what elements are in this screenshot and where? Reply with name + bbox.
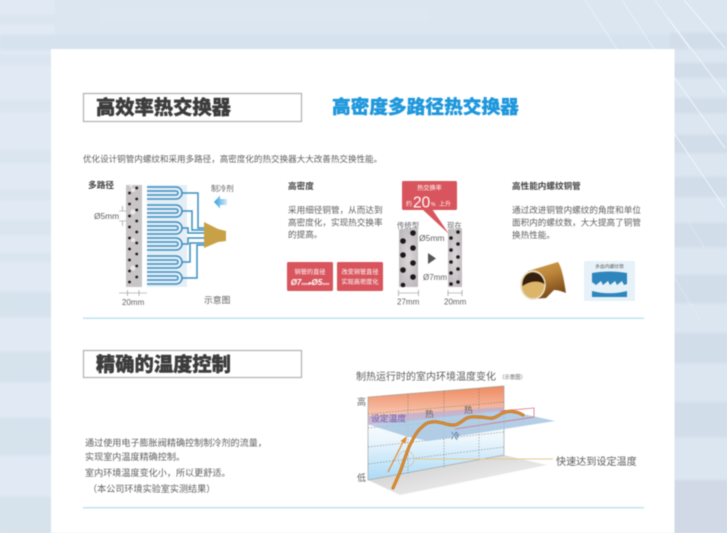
description: 换热性能。 bbox=[512, 229, 555, 240]
description: temperature control: 通过使用电子膨胀阀精确控制制冷剂的流量， bbox=[85, 437, 267, 448]
description: temperature control: （本公司环境实验室实测结果） bbox=[88, 483, 215, 494]
badge: high density change: 实现高密度化 bbox=[341, 278, 379, 286]
chart title: （示意图） bbox=[499, 373, 526, 381]
chart floor bbox=[368, 455, 547, 495]
label: 20mm: 20mm bbox=[122, 298, 145, 307]
current strip: 20mm bbox=[444, 298, 467, 306]
description bbox=[512, 204, 641, 240]
set temperature ribbon bbox=[368, 407, 504, 425]
set temperature band bbox=[455, 408, 534, 429]
label: 热: 热 bbox=[425, 408, 434, 419]
description: temperature control: 室内环境温度变化小，所以更舒适。 bbox=[85, 467, 231, 478]
fin strip with tube holes bbox=[126, 184, 142, 287]
traditional strip: 27mm bbox=[397, 298, 420, 306]
callout: 快速达到设定温度 bbox=[398, 451, 637, 468]
label: 制冷剂: 制冷剂 bbox=[211, 183, 234, 193]
label: 设定温度: 设定温度 bbox=[371, 412, 406, 424]
callout: 20% increase: 上升 bbox=[439, 200, 451, 208]
description: 通过改进铜管内螺纹的角度和单位 bbox=[512, 204, 641, 215]
refrigerant tubes bbox=[147, 185, 205, 287]
divider bbox=[83, 507, 644, 508]
heading: 精确的温度控制 bbox=[84, 350, 302, 378]
intro text: 优化设计铜管内螺纹和采用多路径，高密度化的热交换器大大改善热交换性能。 bbox=[83, 153, 382, 164]
label: Ø7mm: Ø7mm bbox=[423, 273, 447, 282]
callout: 20% increase: 热交换率 bbox=[417, 184, 442, 192]
label: Ø5mm bbox=[94, 206, 126, 226]
axis label: 高: 高 bbox=[357, 396, 366, 407]
label: 20mm bbox=[119, 290, 147, 307]
set temperature plane bbox=[370, 410, 555, 441]
panel: multi-path diagram bbox=[88, 179, 234, 307]
chart wall bbox=[368, 386, 504, 480]
chart: indoor temperature change during heating bbox=[356, 370, 637, 495]
label: 热: 热 bbox=[464, 404, 473, 415]
subheading: 高密度: 高密度 bbox=[288, 180, 314, 191]
subheading: 高性能内螺纹铜管 bbox=[512, 180, 581, 191]
label: Ø5mm: Ø5mm bbox=[419, 233, 444, 243]
callout: 20% increase bbox=[402, 181, 457, 234]
traditional strip bbox=[397, 221, 420, 306]
badge: high density change bbox=[337, 262, 383, 291]
description: 采用细径铜管，从而达到 bbox=[288, 204, 383, 215]
label: 多路径: 多路径 bbox=[88, 179, 114, 190]
divider bbox=[83, 318, 644, 319]
panel: inner-grooved copper tube bbox=[512, 180, 641, 301]
white content panel bbox=[51, 49, 674, 533]
arrow: traditional to current bbox=[428, 253, 436, 264]
arrow: rapid rise bbox=[388, 436, 407, 472]
icon: groove cross-section: 多齿内螺纹管 bbox=[595, 263, 624, 270]
callout: 20% increase: 20 bbox=[413, 194, 431, 212]
distributor valve bbox=[204, 222, 226, 248]
label: 冷: 冷 bbox=[451, 430, 460, 441]
chart title bbox=[356, 370, 526, 383]
heading: 高密度多路径热交换器: 高密度多路径热交换器 bbox=[332, 96, 519, 118]
callout: 快速达到设定温度: 快速达到设定温度 bbox=[556, 455, 637, 468]
label: 示意图: 示意图 bbox=[204, 294, 231, 305]
current strip bbox=[444, 221, 467, 306]
heading: 精确的温度控制: 精确的温度控制 bbox=[96, 353, 231, 376]
panel: high density bbox=[287, 180, 467, 306]
temperature curve bbox=[393, 411, 523, 488]
axis label: 低: 低 bbox=[357, 472, 366, 483]
current strip: 现在 bbox=[447, 221, 462, 230]
heading: 高效率热交换器: 高效率热交换器 bbox=[96, 96, 232, 119]
callout: 20% increase: % bbox=[431, 202, 436, 208]
badge: tube diameter: Ø7mm▸Ø5mm bbox=[291, 278, 330, 287]
badge: high density change: 改变铜管直径 bbox=[341, 268, 379, 276]
description: 高密度化，实现热交换率 bbox=[288, 216, 383, 228]
label: Ø5mm: Ø5mm bbox=[94, 211, 119, 221]
traditional strip: 传统型 bbox=[397, 221, 420, 230]
heading: 高效率热交换器 bbox=[84, 94, 302, 122]
chart title: 制热运行时的室内环境温度变化 bbox=[356, 370, 496, 383]
description: 面积内的螺纹数，大大提高了铜管 bbox=[512, 216, 641, 228]
icon: copper tube bbox=[521, 262, 566, 299]
description: temperature control: 实现室内温度精确控制。 bbox=[85, 451, 185, 462]
description: temperature control bbox=[85, 437, 267, 494]
badge: tube diameter: 铜管的直径 bbox=[295, 268, 325, 276]
description bbox=[288, 204, 383, 240]
badge: tube diameter bbox=[287, 262, 333, 291]
callout: 20% increase: 约 bbox=[406, 200, 412, 208]
description: 的提高。 bbox=[288, 228, 322, 240]
arrow: refrigerant inflow bbox=[214, 196, 227, 208]
